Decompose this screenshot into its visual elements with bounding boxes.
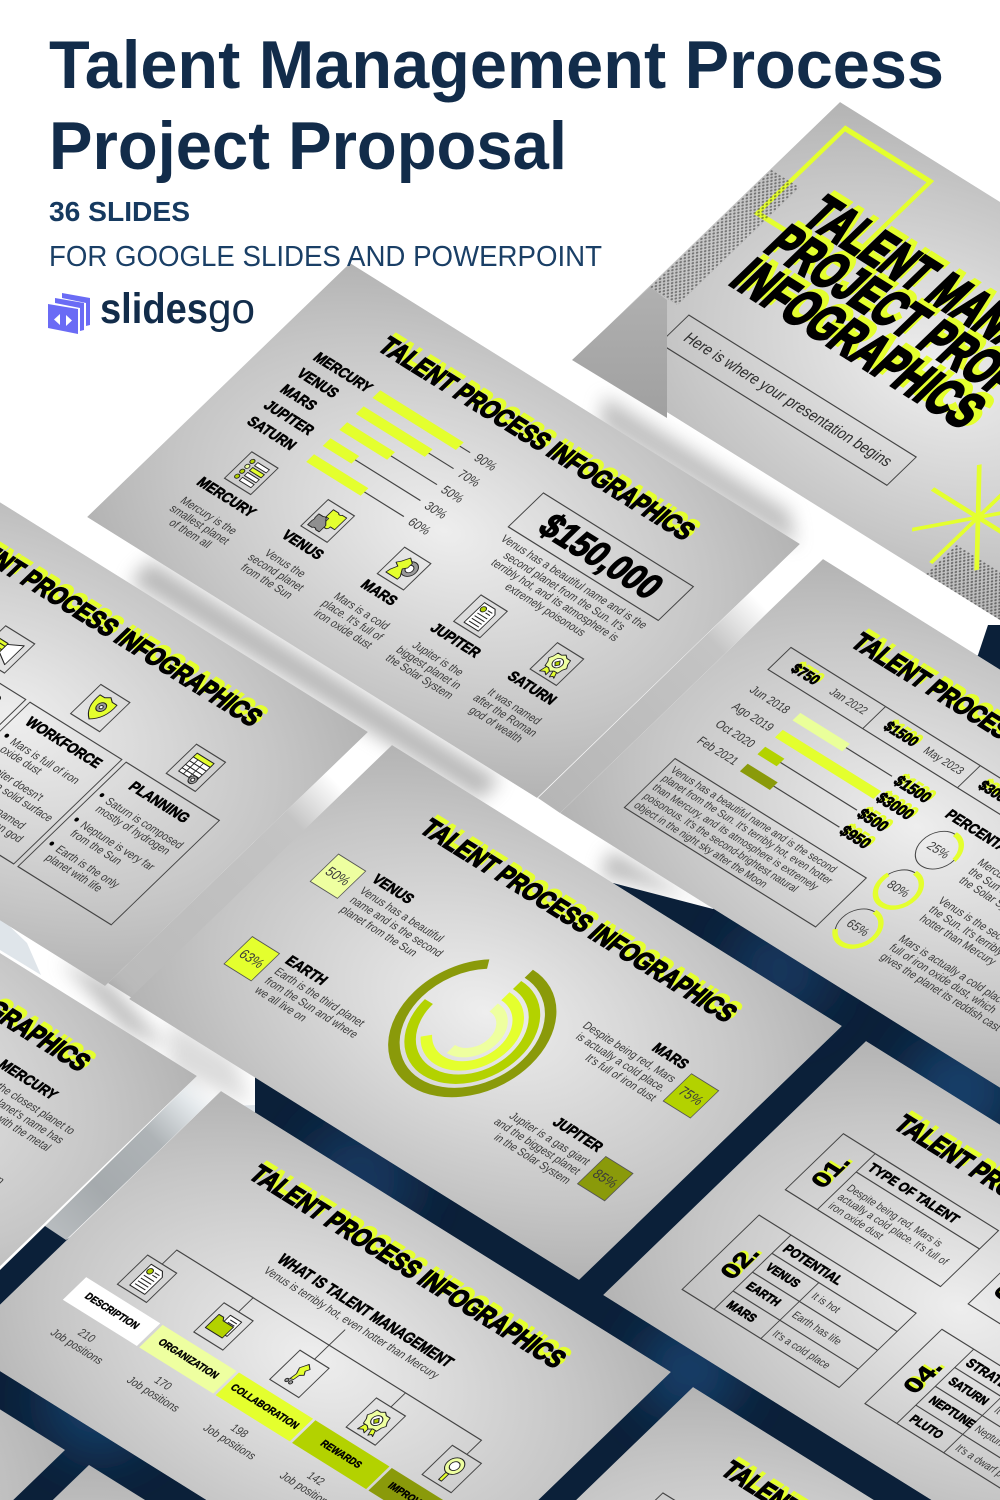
slide: donut chart [129, 745, 842, 1280]
price table: May 2023 [920, 745, 967, 777]
item: Jupiter: Jupiter is the [409, 640, 466, 679]
heading: TALENT PROCESS INFOGRAPHICS [377, 330, 706, 543]
timeline bars: Jun 2018 [746, 684, 793, 717]
callout: $150,000 [491, 492, 694, 641]
item: Mars [576, 1022, 720, 1118]
block 02: POTENTIAL [780, 1241, 847, 1288]
block 02: VENUS [762, 1261, 803, 1290]
item: Venus: Venus the [261, 548, 308, 580]
bar chart: VENUS [293, 366, 342, 401]
column: planning: mostly of hydrogen [92, 804, 173, 857]
category strip: DESCRIPTION [82, 1291, 141, 1332]
item: Earth: from the Sun and where [261, 975, 361, 1041]
item: Venus: planet from the Sun [337, 904, 420, 959]
subtitle: compatibility: FOR GOOGLE SLIDES AND POWERPOINT [49, 241, 602, 273]
timeline bars: $1500 [894, 771, 939, 804]
heading: TALENT PROCESS INFOGRAPHICS [243, 1160, 572, 1374]
gap gradients [0, 396, 823, 1240]
item: Jupiter: Jupiter is a gas giant [506, 1110, 593, 1168]
slide: title cover [577, 102, 1000, 637]
column: planning: Earth is the only [52, 844, 122, 891]
item: Mercury [0, 1059, 74, 1184]
text box: Venus has a beautiful name and is the second [667, 764, 840, 875]
bar chart: 60% [404, 515, 434, 537]
item: Earth: EARTH [281, 953, 331, 989]
bar chart: JUPITER [259, 398, 318, 439]
slide: what is talent management [0, 1091, 671, 1500]
bar chart: 90% [471, 451, 500, 473]
column: strategic [0, 625, 36, 725]
heading: TALENT PROCESS INFOGRAPHICS [414, 814, 743, 1028]
item: Mercury: of them all [166, 517, 214, 551]
block 01: iron oxide dust [825, 1200, 886, 1242]
item: Jupiter: and the biggest planet [491, 1116, 583, 1177]
slide: bottom center [430, 1387, 1000, 1500]
timeline bars: $950 [839, 821, 879, 850]
timeline bars: $3000 [872, 790, 918, 823]
subtitle box [660, 315, 916, 485]
subtitle box: Here is where your presentation begins [679, 330, 896, 470]
job position counts: Job positions [200, 1422, 259, 1462]
item: Saturn: SATURN [503, 669, 560, 708]
item: Mercury: Mercury is the [177, 495, 240, 537]
item: Jupiter: biggest planet in [393, 644, 464, 692]
percentage rings [832, 808, 1000, 949]
item: Venus: name and is the second [346, 895, 445, 960]
block 02: EARTH [743, 1280, 784, 1309]
item: Jupiter: 85% [589, 1167, 621, 1191]
column: workforce: WORKFORCE [21, 715, 105, 772]
price table: $1500 [884, 717, 926, 748]
item: Earth: we all live on [251, 984, 309, 1024]
job position counts [47, 1317, 422, 1500]
yellow square frame [757, 128, 930, 266]
subtitle: slide count: 36 SLIDES [49, 196, 190, 227]
block 04: 04. [901, 1355, 950, 1396]
radial bar chart [388, 959, 556, 1098]
job position counts: 198 [227, 1422, 251, 1440]
slide: Mercury text [0, 953, 197, 1266]
item: Earth: 63% [236, 947, 268, 971]
item: Mercury [169, 451, 279, 548]
star [912, 464, 1000, 570]
percentage rings: 25% [923, 839, 953, 861]
subheading: WHAT IS TALENT MANAGEMENT [273, 1251, 458, 1371]
block 02: It is hot [808, 1291, 843, 1316]
item: Mars: is actually a cold place. [573, 1031, 669, 1094]
item: Earth: Earth is the third planet [271, 966, 367, 1029]
category strip [63, 1277, 466, 1500]
heading [0, 998, 96, 1071]
timeline bars: $500 [857, 804, 896, 833]
item: Mercury: MERCURY [193, 475, 260, 521]
item: Venus [310, 854, 445, 957]
callout: $150,000: second planet from the Sun. It's [500, 550, 628, 633]
block 01: TYPE OF TALENT [864, 1160, 963, 1226]
timeline bars: $950 [835, 823, 875, 852]
column: workforce [0, 684, 131, 865]
item: Saturn: It was named [484, 687, 544, 727]
cover title [728, 190, 1000, 428]
price table: $750 [791, 659, 828, 686]
block 02 [682, 1215, 916, 1387]
price table: Jan 2022 [826, 686, 870, 717]
percentage text [877, 857, 1000, 1036]
header title: Project Proposal [49, 108, 567, 184]
heading: TALENT PROCESS INFOGRAPHICS [372, 332, 701, 546]
slide: bottom left [0, 1465, 539, 1500]
item: Mars [314, 546, 432, 649]
item: Venus: Venus has a beautiful [356, 885, 446, 945]
block 04 [865, 1329, 1000, 1500]
block 02: Earth has life [789, 1309, 845, 1348]
text box: poisonous. It's the second-brightest natural [640, 791, 801, 895]
slide: timeline and percentages [560, 559, 1000, 1094]
bar chart: SATURN [243, 414, 300, 454]
item: Venus: 50% [322, 864, 354, 888]
bar chart: 30% [421, 499, 451, 521]
heading: TALENT PROCESS INFOGRAPHICS [419, 812, 748, 1025]
column: planning: Neptune is very far [77, 820, 157, 873]
price table [767, 646, 1000, 815]
callout: $150,000: Venus has a beautiful name and is the [497, 533, 650, 631]
timeline bars: $1500 [889, 773, 935, 806]
block 02: 02. [718, 1241, 768, 1282]
item: Jupiter: JUPITER [548, 1115, 607, 1155]
callout: $150,000: extremely poisonous [501, 581, 589, 639]
block 01: 01. [806, 1151, 856, 1192]
item: Jupiter [386, 594, 508, 699]
bar chart: MERCURY [309, 350, 376, 396]
bar chart: MARS [276, 382, 320, 414]
item: Venus: VENUS [368, 872, 417, 907]
bar chart [243, 350, 501, 538]
block 01 [785, 1134, 998, 1287]
block 04: SATURN [945, 1375, 992, 1408]
callout: $150,000: $150,000 [530, 507, 672, 606]
heading [852, 628, 1000, 738]
column: planning: planet with life [42, 852, 105, 895]
item: Saturn [468, 642, 584, 742]
callout: $150,000: terribly hot, and its atmosphere is [488, 557, 622, 644]
slide: numbered tables [603, 1041, 1000, 1500]
job position counts: Job positions [47, 1327, 106, 1367]
slide: bars and icons [87, 263, 800, 798]
item: Venus: from the Sun [237, 562, 295, 601]
navy background shape [0, 625, 1000, 1500]
heading: TALENT PROCESS INFOGRAPHICS [248, 1158, 577, 1371]
column: planning: from the Sun [67, 828, 125, 867]
text box: object in the night sky after the Moon [631, 800, 770, 890]
logo: slidesgo [48, 285, 255, 334]
block 01: 01. [809, 1150, 858, 1190]
item: Mars: MARS [357, 577, 401, 609]
text box: than Mercury, and its atmosphere is extremely [649, 782, 822, 893]
block 02: 02. [715, 1243, 765, 1283]
hierarchy lines [162, 1235, 498, 1454]
header title: Talent Management Process [49, 27, 944, 103]
bar chart: 50% [438, 483, 467, 505]
block 01: Despite being red, Mars is [844, 1183, 945, 1249]
block 01: actually a cold place. It's full of [834, 1191, 951, 1268]
block 03 [968, 1248, 1000, 1401]
timeline bars: $3000 [876, 788, 922, 821]
timeline bars [696, 686, 936, 848]
percentage rings: 80% [883, 878, 913, 900]
item: Venus [240, 498, 356, 599]
timeline bars: Feb 2021 [694, 734, 741, 768]
column: planning: PLANNING [124, 779, 193, 826]
item: Saturn: after the Roman [470, 692, 540, 739]
item: Jupiter: JUPITER [426, 620, 484, 661]
subheading: Venus is terribly hot, even hotter than Mercury [260, 1265, 442, 1382]
column: planning: Saturn is composed [102, 796, 186, 851]
block 04: PLUTO [906, 1413, 946, 1441]
logo: slidesgo: go [208, 285, 255, 333]
item: Jupiter: in the Solar System [491, 1132, 573, 1187]
timeline bars: Oct 2020 [712, 718, 759, 751]
halftone bands [578, 170, 1000, 637]
column: planning [17, 744, 226, 926]
item: Jupiter [494, 1112, 634, 1202]
block 02: It's a cold place [769, 1328, 833, 1372]
category strip: ORGANIZATION [155, 1337, 221, 1381]
percentage text: hotter than Mercury [916, 913, 999, 968]
item: Mars: Mars is a cold [330, 591, 392, 632]
column: workforce: Mars is full of iron [7, 736, 82, 787]
item: Mars: It's full of iron dust [582, 1052, 659, 1104]
item: Mars: MARS [648, 1041, 692, 1072]
item: Saturn: god of wealth [466, 705, 525, 745]
category strip: COLLABORATION [227, 1382, 301, 1431]
item: Venus: VENUS [277, 528, 327, 563]
job position counts: 210 [74, 1327, 98, 1345]
item: Earth [224, 936, 365, 1038]
timeline bars: Ago 2019 [728, 700, 777, 734]
job position counts: Job positions [124, 1375, 182, 1415]
bar chart: 70% [454, 467, 484, 489]
percentage rings: 65% [843, 917, 873, 939]
slide: bottom left corner [0, 1169, 65, 1500]
logo: slidesgo: slides [100, 285, 208, 333]
item: Jupiter: the Solar System [382, 653, 456, 702]
job position counts: 170 [151, 1375, 174, 1393]
slide: workforce table [0, 451, 368, 986]
item: Mars: iron oxide dust [311, 608, 375, 651]
item: Mars: 75% [675, 1084, 707, 1108]
category strip: REWARDS [317, 1439, 365, 1471]
timeline bars: $500 [853, 806, 892, 835]
block 04: 04. [898, 1357, 948, 1398]
item: Mars: place. It's full of [318, 598, 386, 644]
job position counts: 142 [304, 1470, 327, 1488]
price table: $1500 [879, 719, 922, 750]
item: Mars: Despite being red, Mars [580, 1020, 679, 1085]
item: Mercury: smallest planet [166, 503, 232, 547]
block 02: MARS [723, 1299, 760, 1325]
text box [624, 759, 866, 927]
darker corner on cover [572, 287, 667, 418]
block 04: NEPTUNE [926, 1394, 978, 1431]
box outline [614, 1493, 803, 1500]
header title [49, 27, 944, 184]
text box: planet from the Sun. It's terribly hot, even hotter [658, 773, 836, 887]
icon row [117, 1255, 481, 1493]
price table: $750 [787, 661, 823, 688]
percentage text: full of iron oxide dust, which [886, 942, 999, 1016]
item: Venus: second planet [245, 552, 306, 594]
